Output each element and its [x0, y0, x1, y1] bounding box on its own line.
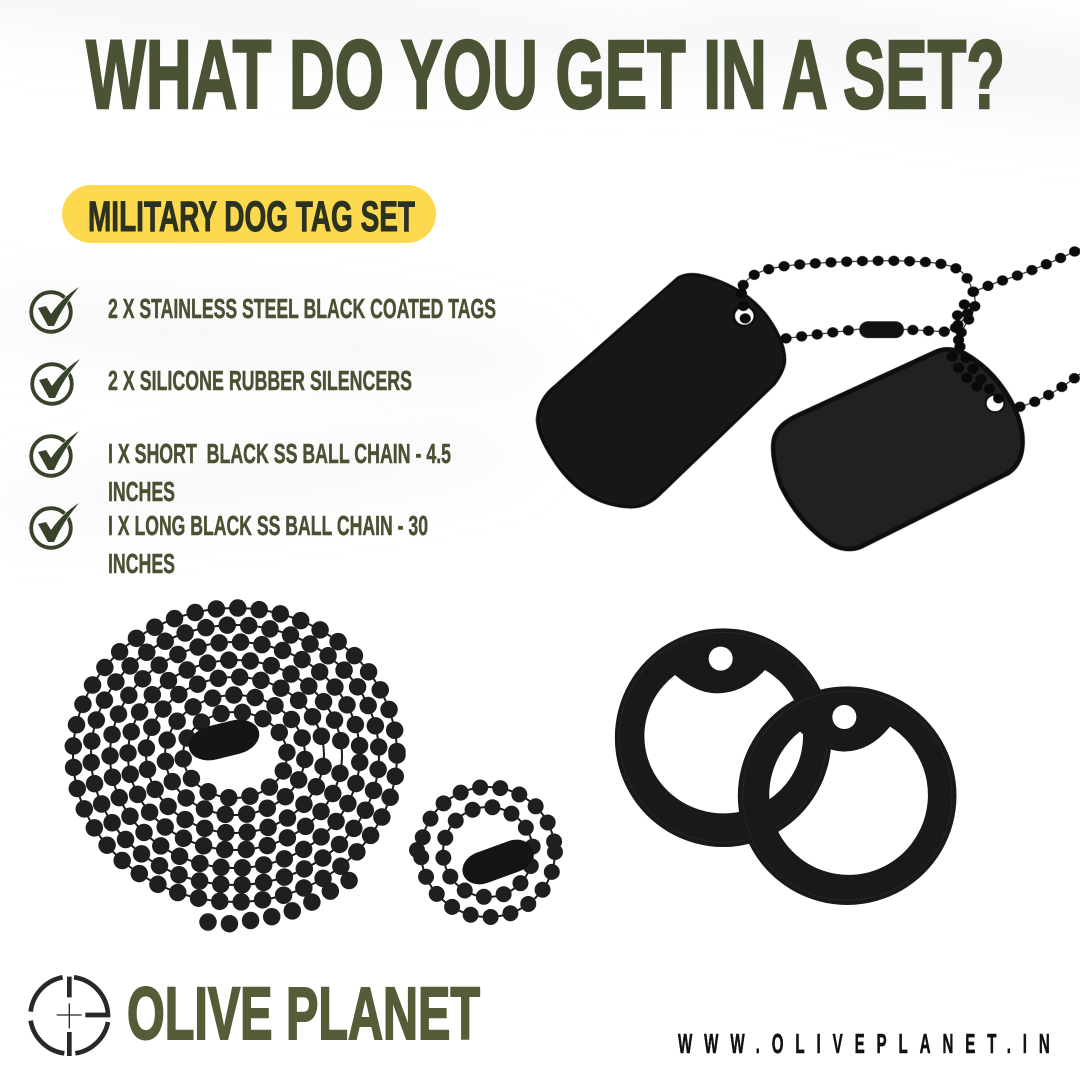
item 2 text: 2 X SILICONE RUBBER SILENCERS [108, 365, 412, 396]
item 1 text: 2 X STAINLESS STEEL BLACK COATED TAGS [108, 293, 496, 324]
chains through tag holes [741, 293, 1000, 400]
chain barrel connector [859, 321, 904, 338]
checklist [31, 287, 496, 579]
badge: military dog tag set: MILITARY DOG TAG SET [88, 193, 415, 241]
logo: olive planet [31, 972, 480, 1056]
website url: WWW.OLIVEPLANET.IN [678, 1028, 1050, 1059]
icon: check 1 [31, 287, 79, 332]
long ball chain [73, 608, 397, 924]
item 4 text: INCHES [108, 548, 175, 579]
logo crosshair mark [31, 977, 108, 1056]
logo wordmark: OLIVE PLANET [127, 972, 480, 1055]
item 3 text: I X SHORT BLACK SS BALL CHAIN - 4.5 [108, 438, 451, 469]
silencer 1 [615, 628, 831, 847]
icon: check 4 [31, 503, 79, 548]
item 4 text: I X LONG BLACK SS BALL CHAIN - 30 [108, 510, 428, 541]
badge: military dog tag set [62, 185, 436, 243]
silencer 2 [738, 686, 956, 905]
item 3 text [108, 438, 451, 507]
short chain barrel connector [458, 834, 538, 890]
icon: check 2 [32, 359, 80, 404]
tag 1 [536, 273, 786, 509]
tag 2 [771, 347, 1025, 551]
short ball chain [417, 787, 555, 917]
long chain barrel connector [185, 715, 263, 765]
silicone silencers [615, 628, 956, 905]
item 4 text [108, 510, 428, 579]
icon: check 3 [31, 431, 79, 476]
dog tags with chain [536, 243, 1080, 551]
item 3 text: INCHES [108, 476, 175, 507]
